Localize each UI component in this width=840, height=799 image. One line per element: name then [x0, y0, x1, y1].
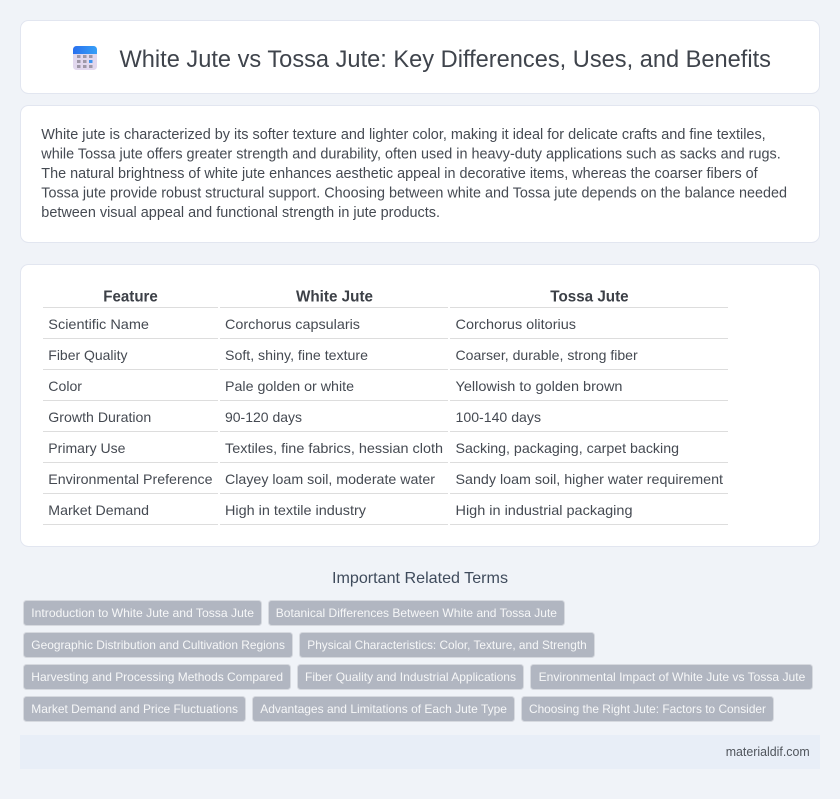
tag: Botanical Differences Between White and Tossa Jute	[276, 606, 557, 620]
tag	[24, 696, 246, 722]
row: fiber quality	[48, 347, 638, 363]
row: market demand: High in textile industry	[225, 502, 366, 518]
row: scientific name: Corchorus olitorius	[456, 316, 576, 332]
row: color: Yellowish to golden brown	[456, 378, 622, 394]
tag	[268, 600, 564, 626]
tag: Introduction to White Jute and Tossa Jute	[31, 606, 254, 620]
row: scientific name: Scientific Name	[48, 316, 149, 332]
row: environmental preference: Environmental Preference	[48, 471, 213, 487]
tag	[24, 632, 292, 658]
row: market demand: Market Demand	[48, 502, 149, 518]
row: primary use: Primary Use	[48, 440, 126, 456]
row: fiber quality: Soft, shiny, fine texture	[225, 347, 368, 363]
tags: related terms	[24, 600, 812, 722]
footer: materialdif.com	[726, 744, 810, 759]
footer	[20, 735, 820, 769]
tag	[530, 664, 812, 690]
tag: Physical Characteristics: Color, Texture, and Strength	[307, 638, 587, 652]
tag	[252, 696, 514, 722]
table header row: Feature	[103, 288, 158, 306]
tag	[24, 664, 290, 690]
tag: Harvesting and Processing Methods Compared	[31, 670, 283, 684]
tag: Geographic Distribution and Cultivation Regions	[31, 638, 285, 652]
row: market demand	[48, 502, 633, 518]
tag	[300, 632, 594, 658]
row: growth duration: 90-120 days	[225, 409, 302, 425]
tag: Choosing the Right Jute: Factors to Consider	[529, 702, 766, 716]
icon: calendar	[73, 46, 97, 70]
row: environmental preference: Sandy loam soil, higher water requirement	[456, 471, 723, 487]
tag	[522, 696, 774, 722]
tag	[298, 664, 524, 690]
panel: introduction text: while Tossa jute offers greater strength and durability, often used in heavy-duty applications such as sacks and rugs.	[40, 146, 781, 162]
row: primary use	[48, 440, 679, 456]
row: fiber quality: Fiber Quality	[48, 347, 127, 363]
panel: introduction text: The natural brightness of white jute enhances aesthetic appeal in decorative items, whereas the coarser fibers of	[41, 166, 759, 182]
row: growth duration	[48, 409, 541, 425]
row: market demand: High in industrial packaging	[456, 502, 632, 518]
row: scientific name	[48, 316, 576, 332]
row: environmental preference: Clayey loam soil, moderate water	[225, 471, 435, 487]
panel: introduction text: White jute is characterized by its softer texture and lighter color, making it ideal for delicate crafts and fine textiles,	[41, 127, 766, 143]
panel: introduction text: Tossa jute provide robust structural support. Choosing between white and Tossa jute depends on the balance needed	[41, 186, 787, 202]
panel: introduction text	[20, 106, 820, 242]
table header row: White Jute	[296, 288, 373, 306]
tag: Advantages and Limitations of Each Jute Type	[260, 702, 507, 716]
tag	[24, 600, 262, 626]
row: color: Color	[48, 378, 82, 394]
row: scientific name: Corchorus capsularis	[225, 316, 360, 332]
row: primary use: Sacking, packaging, carpet backing	[456, 440, 679, 456]
tag: Market Demand and Price Fluctuations	[31, 702, 238, 716]
panel: introduction text: between visual appeal and functional strength in jute products.	[41, 205, 440, 221]
row: color: Pale golden or white	[225, 378, 354, 394]
row: fiber quality: Coarser, durable, strong fiber	[456, 347, 638, 363]
tag: Environmental Impact of White Jute vs Tossa Jute	[539, 670, 806, 684]
row: primary use: Textiles, fine fabrics, hessian cloth	[225, 440, 443, 456]
table header row: Tossa Jute	[550, 288, 629, 306]
table header row	[103, 288, 629, 306]
row: growth duration: 100-140 days	[456, 409, 541, 425]
row: color	[48, 378, 623, 394]
title: White Jute vs Tossa Jute: Key Differences, Uses, and Benefits	[120, 46, 771, 73]
row: environmental preference	[48, 471, 723, 487]
tag: Fiber Quality and Industrial Applications	[305, 670, 516, 684]
panel: header	[20, 20, 820, 94]
panel: comparison table	[20, 264, 820, 546]
row: growth duration: Growth Duration	[48, 409, 151, 425]
heading: important related terms: Important Related Terms	[332, 570, 508, 587]
